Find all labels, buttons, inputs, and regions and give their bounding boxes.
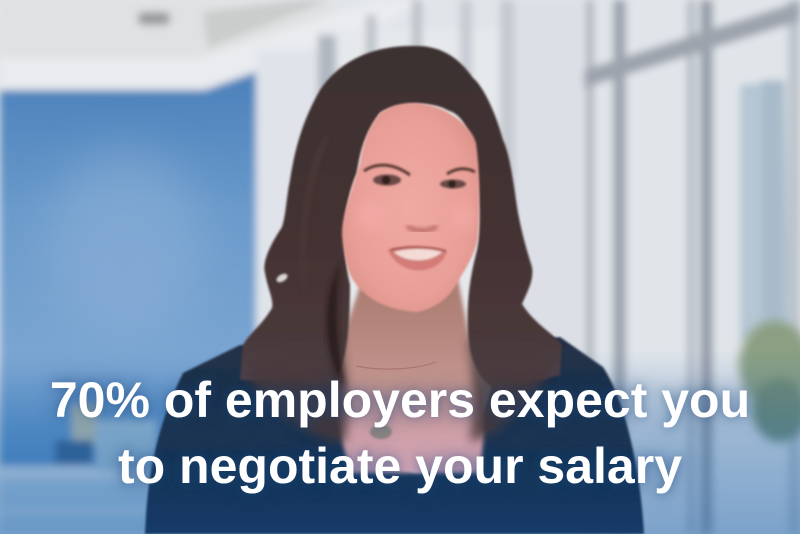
overlay: blue gradient behind caption (0, 350, 800, 534)
eyebrows (364, 165, 475, 175)
hair tuft highlight (275, 272, 289, 284)
figure: woman (145, 46, 644, 534)
hair lower fade, right (468, 340, 555, 442)
neck and chest (337, 280, 484, 473)
cheeks (357, 200, 474, 231)
hair highlight left (302, 130, 330, 300)
hair shadow near neck (327, 260, 345, 390)
mouth (388, 246, 447, 270)
caption line 1: 70% of employers expect you (50, 372, 750, 428)
caption line 2: to negotiate your salary (118, 438, 682, 494)
caption (48, 372, 754, 500)
necklace chain (356, 362, 436, 369)
nose (407, 226, 437, 230)
shirt (145, 337, 644, 534)
hair lower fade, left (250, 340, 348, 442)
eyes (373, 174, 466, 188)
necklace pendant (370, 425, 392, 439)
hair crown and sides (240, 46, 562, 390)
face (342, 103, 479, 312)
